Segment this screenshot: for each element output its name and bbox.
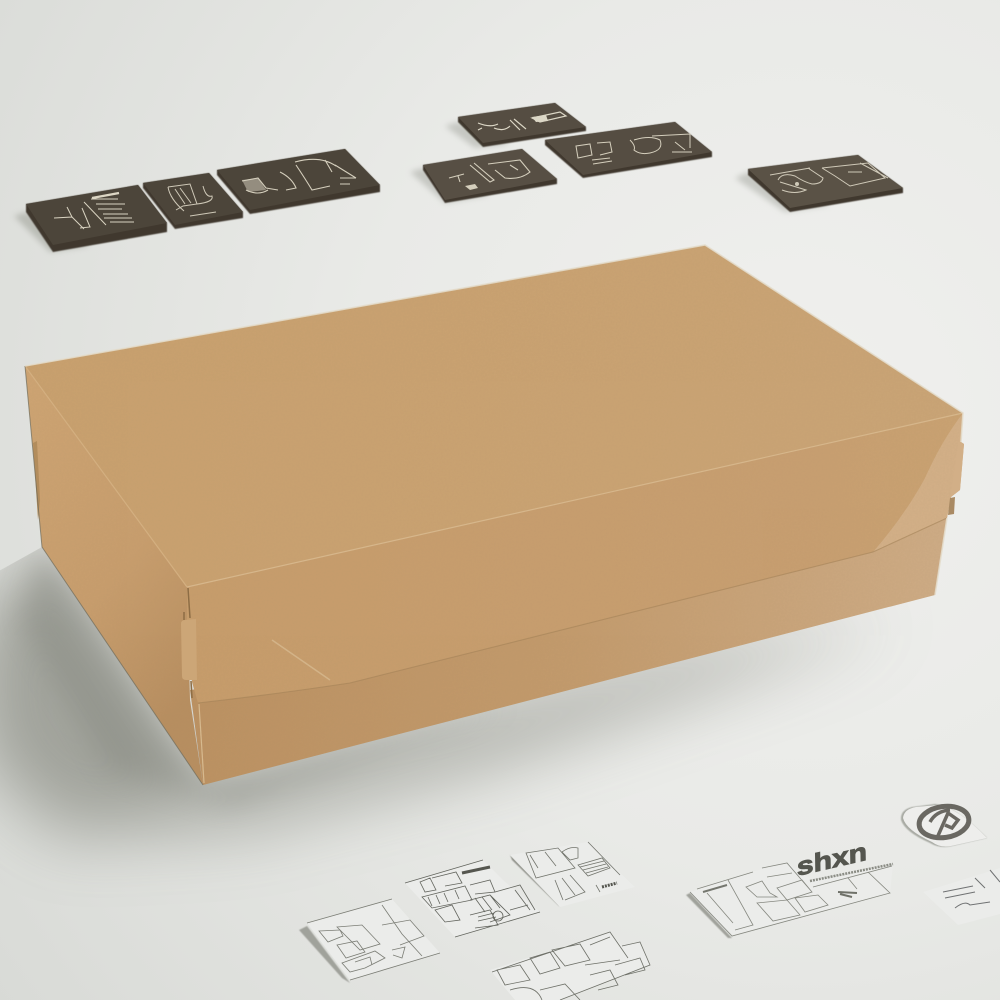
- paper grain: [192, 714, 195, 728]
- lid front flap: [187, 413, 964, 703]
- left ridge: [25, 366, 187, 587]
- tile 4: [445, 103, 586, 148]
- box top face: [25, 245, 963, 587]
- box shadow: [0, 540, 900, 835]
- lid top edge highlight: [187, 413, 963, 587]
- tile 5: [545, 122, 712, 178]
- tile 2: [143, 173, 243, 229]
- lid lower shadow: [198, 518, 947, 703]
- left face dark strip: [33, 441, 40, 520]
- sheet 3: [510, 842, 635, 907]
- tile 6: [410, 149, 557, 203]
- sheet heading: shxn: [797, 838, 867, 882]
- right slot: [948, 497, 955, 515]
- left slot marks: [184, 588, 192, 698]
- corner crease: [199, 704, 204, 783]
- sheet 1: [299, 899, 440, 983]
- kraft box: [0, 240, 1000, 800]
- tile 1: [14, 185, 167, 252]
- left dark edges: [25, 366, 203, 785]
- box lower front face: [190, 510, 947, 785]
- translucent rim: [25, 245, 963, 595]
- sheet 2: [405, 860, 540, 937]
- sheet 4: [490, 932, 650, 1000]
- tiles row left: [14, 149, 380, 252]
- sketch sheets: [299, 803, 1000, 1000]
- logo card: [901, 803, 987, 847]
- tile 3: [217, 149, 380, 214]
- left tab: [181, 619, 197, 680]
- tiles cluster centre: [410, 103, 712, 203]
- tile right: [735, 155, 903, 212]
- sheet 5 with heading: [686, 838, 893, 938]
- box left face: [25, 366, 203, 785]
- lid light fold: [873, 413, 964, 552]
- sheet 6: [923, 868, 1000, 925]
- lid scuff line: [272, 640, 330, 680]
